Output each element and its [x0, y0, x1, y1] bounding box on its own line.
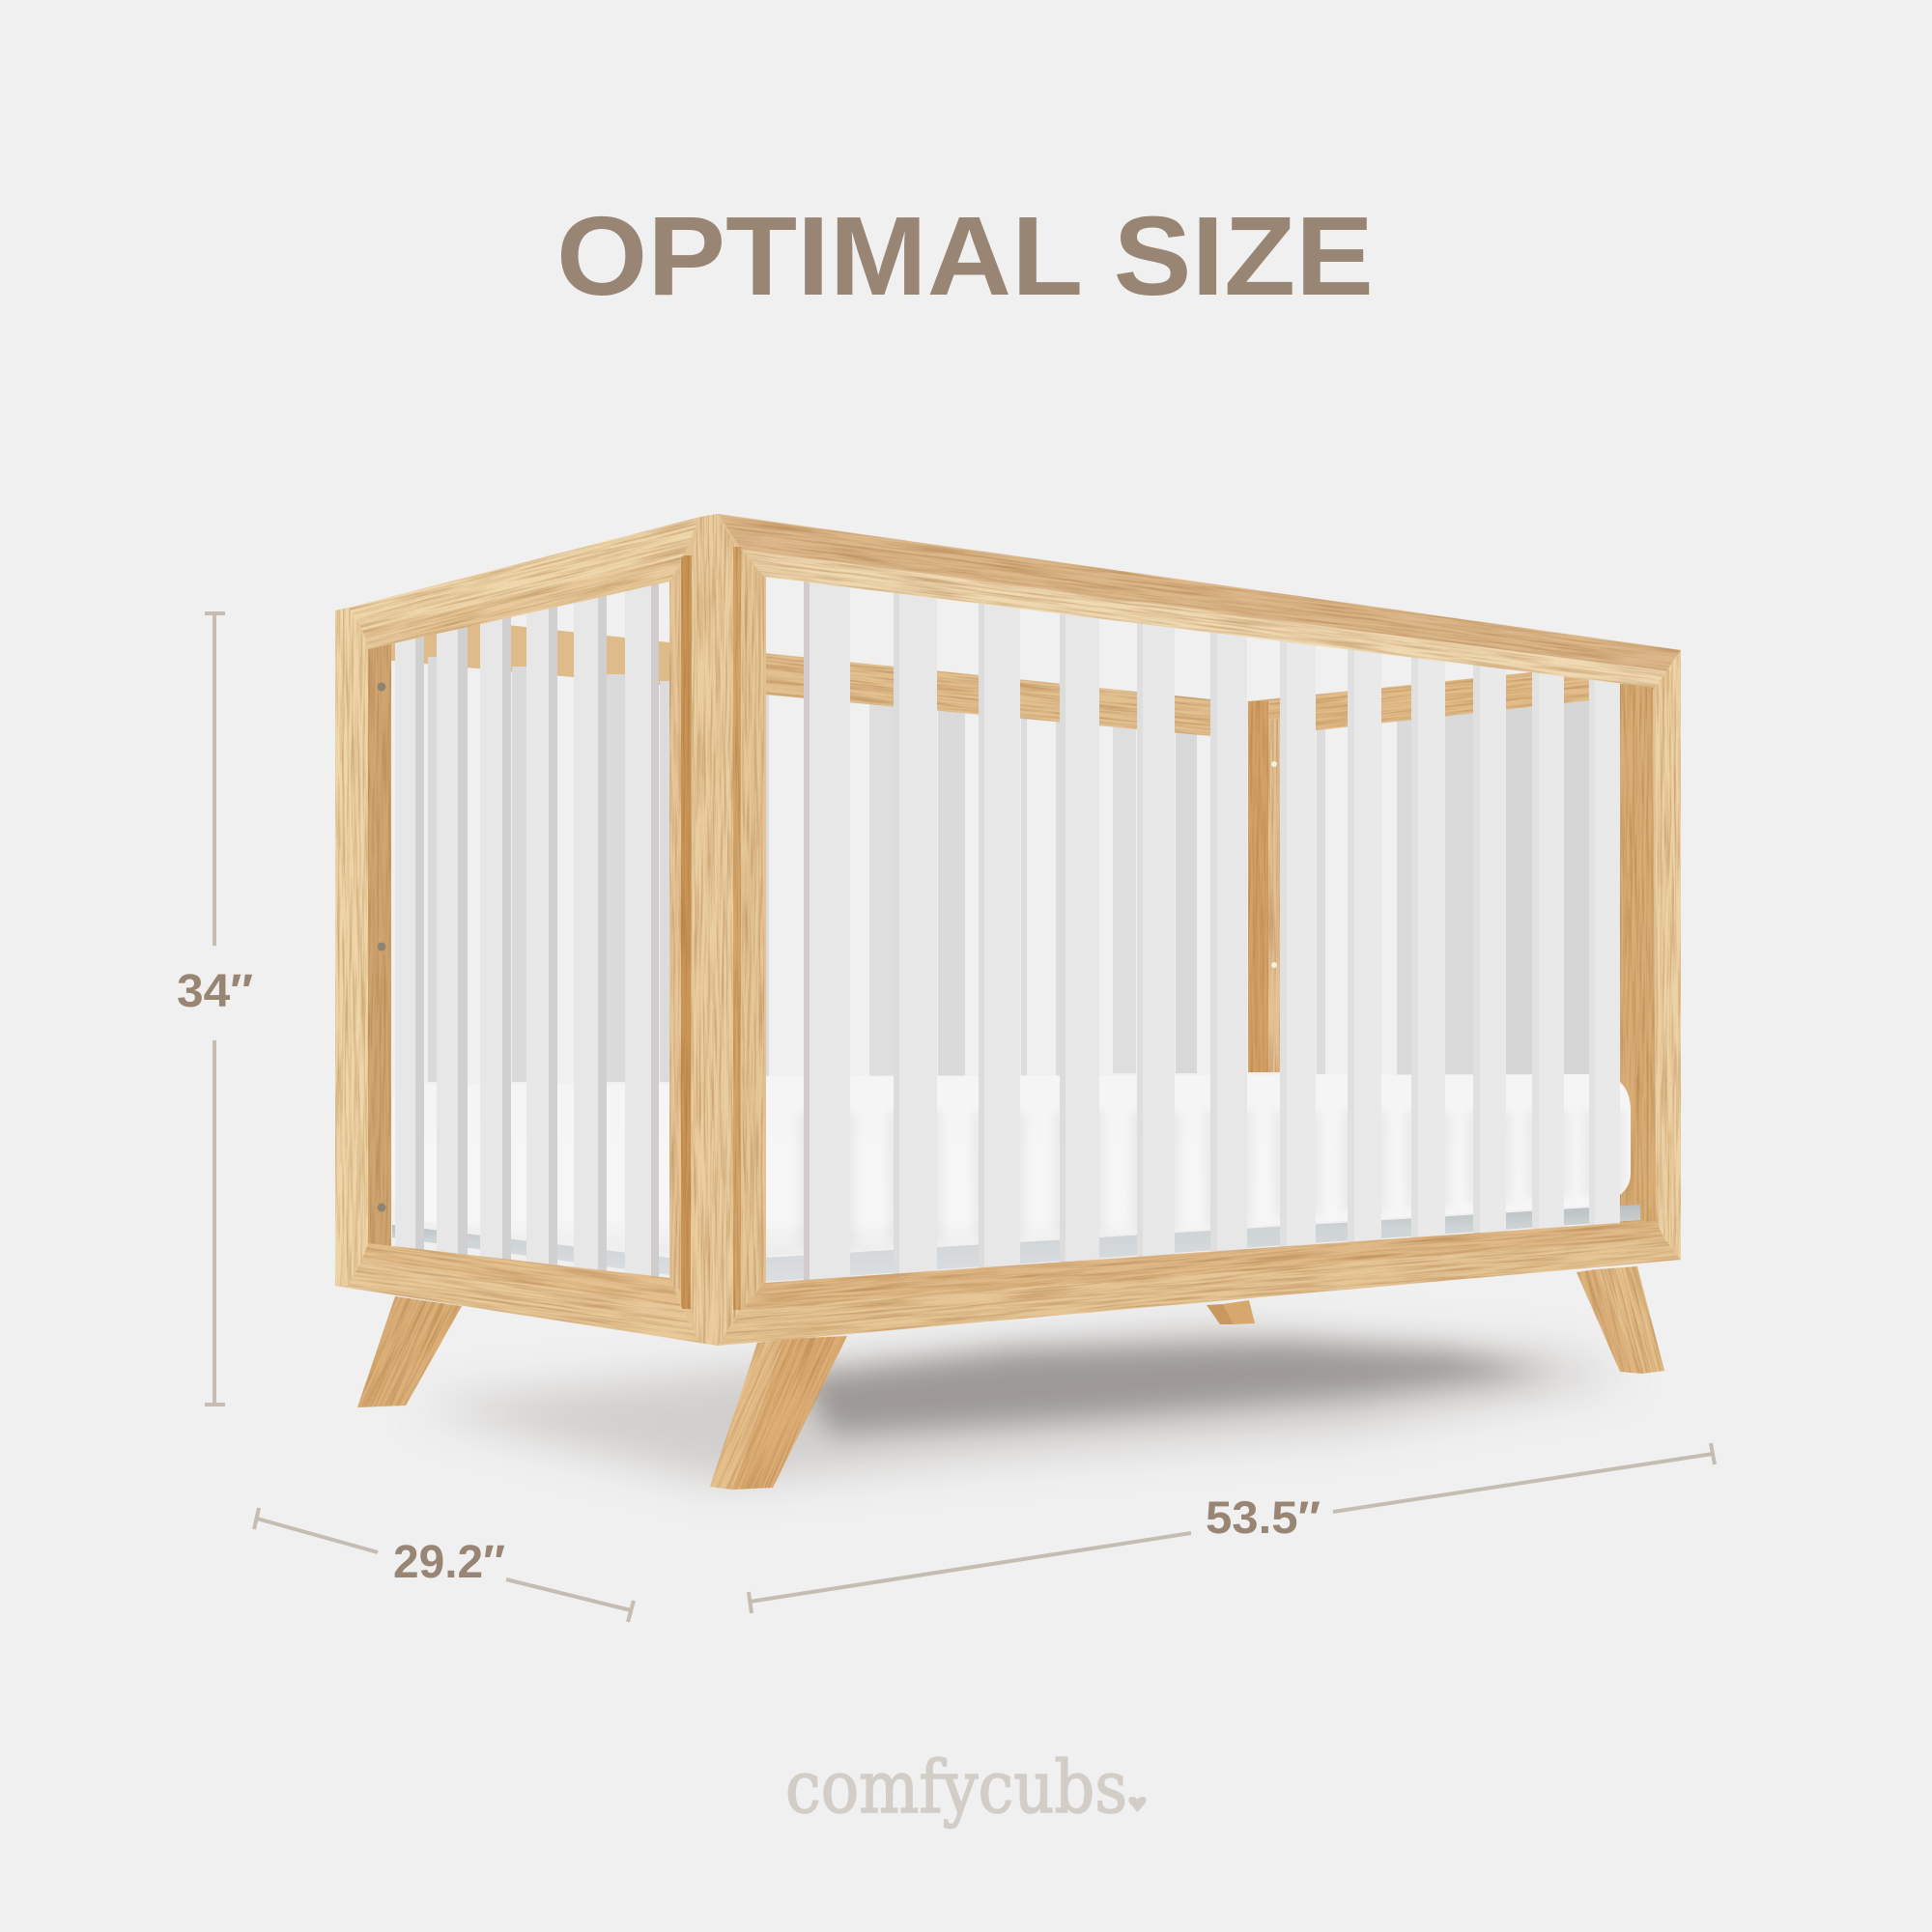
crib illustration: [315, 389, 1701, 1539]
long side outer post: [1656, 650, 1681, 1260]
short side top rail: [323, 435, 730, 726]
long side front slats: [804, 580, 1620, 1281]
short side bottom rail: [324, 1196, 731, 1399]
leg: front centre: [656, 1287, 902, 1539]
short side outer post: [335, 608, 368, 1286]
left panel corner strip: [669, 555, 692, 1309]
dimension: height 34: [177, 613, 253, 1405]
short side front slats: [395, 580, 659, 1279]
leg: right: [1550, 1247, 1691, 1396]
floor shadow: [411, 1328, 1633, 1483]
screws: [377, 682, 1277, 1211]
leg: front left: [315, 1257, 504, 1447]
title: OPTIMAL SIZE: [556, 193, 1374, 319]
dimension: depth 29.2: [254, 1508, 634, 1622]
leg: back centre: [1207, 1300, 1255, 1324]
dimension: length 53.5: 53.5″: [1206, 1492, 1321, 1543]
frame corner underlays: [335, 514, 1681, 1346]
far panel: back rail and back slats: [391, 607, 1656, 1225]
dimension: depth 29.2: 29.2″: [393, 1537, 505, 1588]
long side bottom rail: [707, 1140, 1690, 1430]
slat shadows on mattress: [798, 1111, 1625, 1246]
mattress and support board: [392, 1074, 1640, 1282]
icon: heart: [1128, 1797, 1147, 1812]
dimension: length 53.5: [749, 1443, 1715, 1613]
crib legs: [315, 1247, 1691, 1539]
crib frame: [323, 389, 1701, 1430]
brand logo: comfycubs: [785, 1745, 1127, 1830]
long side top rail: [696, 389, 1701, 809]
right dark inner post: [1620, 684, 1656, 1225]
dimension: height 34: 34″: [177, 966, 253, 1017]
corner post: [691, 514, 764, 1346]
left dark inner post: [368, 638, 391, 1246]
